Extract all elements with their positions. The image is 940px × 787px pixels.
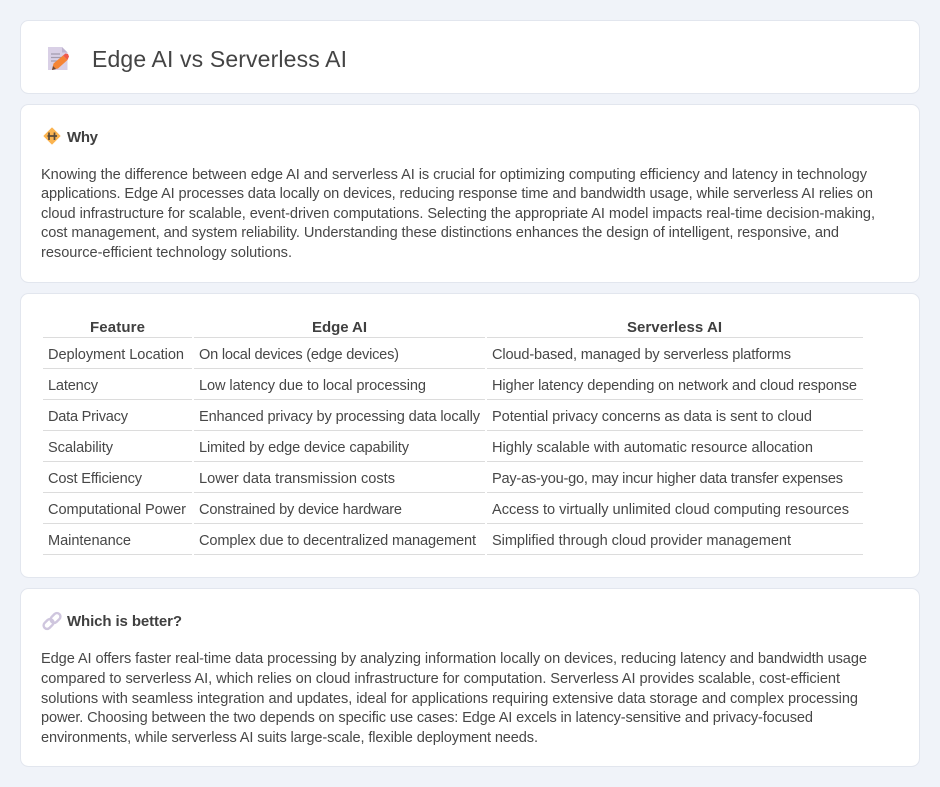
row: scalability (48, 440, 813, 456)
table header row: Edge AI (312, 319, 367, 336)
row: computational power (48, 502, 849, 518)
row: deployment location (48, 347, 791, 363)
heading: which is better: Which is better? (67, 613, 182, 630)
table row lines (43, 338, 863, 554)
row: computational power: Constrained by device hardware (199, 502, 402, 518)
text block: why body: cloud infrastructure for scalable, event-driven computations. Selecting the appropriate AI model impacts real-time decision-making, (41, 206, 875, 222)
text block: which is better body: Edge AI offers faster real-time data processing by analyzing information locally on devices, reducing latency and bandwidth usage (41, 651, 867, 667)
text block: why body: applications. Edge AI processes data locally on devices, reducing response time and bandwidth usage, while serverless AI relies on (41, 186, 873, 202)
text block: why body: resource-efficient technology solutions. (41, 245, 292, 261)
row: cost efficiency: Cost Efficiency (48, 471, 143, 487)
row: computational power: Access to virtually unlimited cloud computing resources (492, 502, 849, 518)
row: latency: Latency (48, 378, 99, 394)
row: maintenance (48, 533, 791, 549)
text block: why body: Knowing the difference between edge AI and serverless AI is crucial for optimizing computing efficiency and latency in technology (41, 167, 868, 183)
panel: why (20, 104, 920, 282)
row: scalability: Scalability (48, 440, 114, 456)
title: Edge AI vs Serverless AI (92, 46, 347, 72)
icon: warning diamond (44, 128, 60, 144)
icon: memo with pencil (48, 47, 69, 70)
table header row (90, 319, 722, 336)
table header row: Feature (90, 319, 145, 336)
text block: which is better body: compared to serverless AI, which relies on cloud infrastructure for computation. Serverless AI provides scalable, cost-efficient (41, 671, 840, 687)
row: scalability: Highly scalable with automatic resource allocation (492, 440, 813, 456)
panel: which is better (20, 588, 920, 766)
row: data privacy: Data Privacy (48, 409, 129, 425)
row: maintenance: Complex due to decentralized management (199, 533, 476, 549)
text block: which is better body (41, 651, 867, 746)
row: cost efficiency (48, 471, 843, 487)
row: maintenance: Maintenance (48, 533, 131, 549)
text block: which is better body: solutions with seamless integration and updates, ideal for applications requiring extensive data storage and complex processing (41, 691, 858, 707)
row: maintenance: Simplified through cloud provider management (492, 533, 791, 549)
icon: link (42, 612, 62, 630)
row: computational power: Computational Power (48, 502, 186, 518)
table header row: Serverless AI (627, 319, 722, 336)
row: cost efficiency: Pay-as-you-go, may incur higher data transfer expenses (492, 471, 843, 487)
row: latency: Higher latency depending on network and cloud response (492, 378, 857, 394)
row: deployment location: On local devices (edge devices) (199, 347, 399, 363)
row: deployment location: Cloud-based, managed by serverless platforms (492, 347, 791, 363)
row: data privacy: Enhanced privacy by processing data locally (199, 409, 481, 425)
row: data privacy (48, 409, 812, 425)
text block: why body (41, 167, 875, 261)
text block: why body: cost management, and system reliability. Understanding these distinctions enhances the design of intelligent, responsive, and (41, 225, 839, 241)
panel: comparison table (20, 294, 920, 578)
text block: which is better body: environments, while serverless AI suits large-scale, flexible deployment needs. (41, 730, 538, 746)
row: latency (48, 378, 857, 394)
panel: header (20, 20, 920, 94)
row: data privacy: Potential privacy concerns as data is sent to cloud (492, 409, 812, 425)
row: deployment location: Deployment Location (48, 347, 184, 363)
text block: which is better body: power. Choosing between the two depends on specific use cases: Edge AI excels in latency-sensitive and privacy-focused (41, 710, 813, 726)
heading: why: Why (67, 129, 99, 146)
row: scalability: Limited by edge device capability (199, 440, 410, 456)
row: latency: Low latency due to local processing (199, 378, 426, 394)
row: cost efficiency: Lower data transmission costs (199, 471, 395, 487)
